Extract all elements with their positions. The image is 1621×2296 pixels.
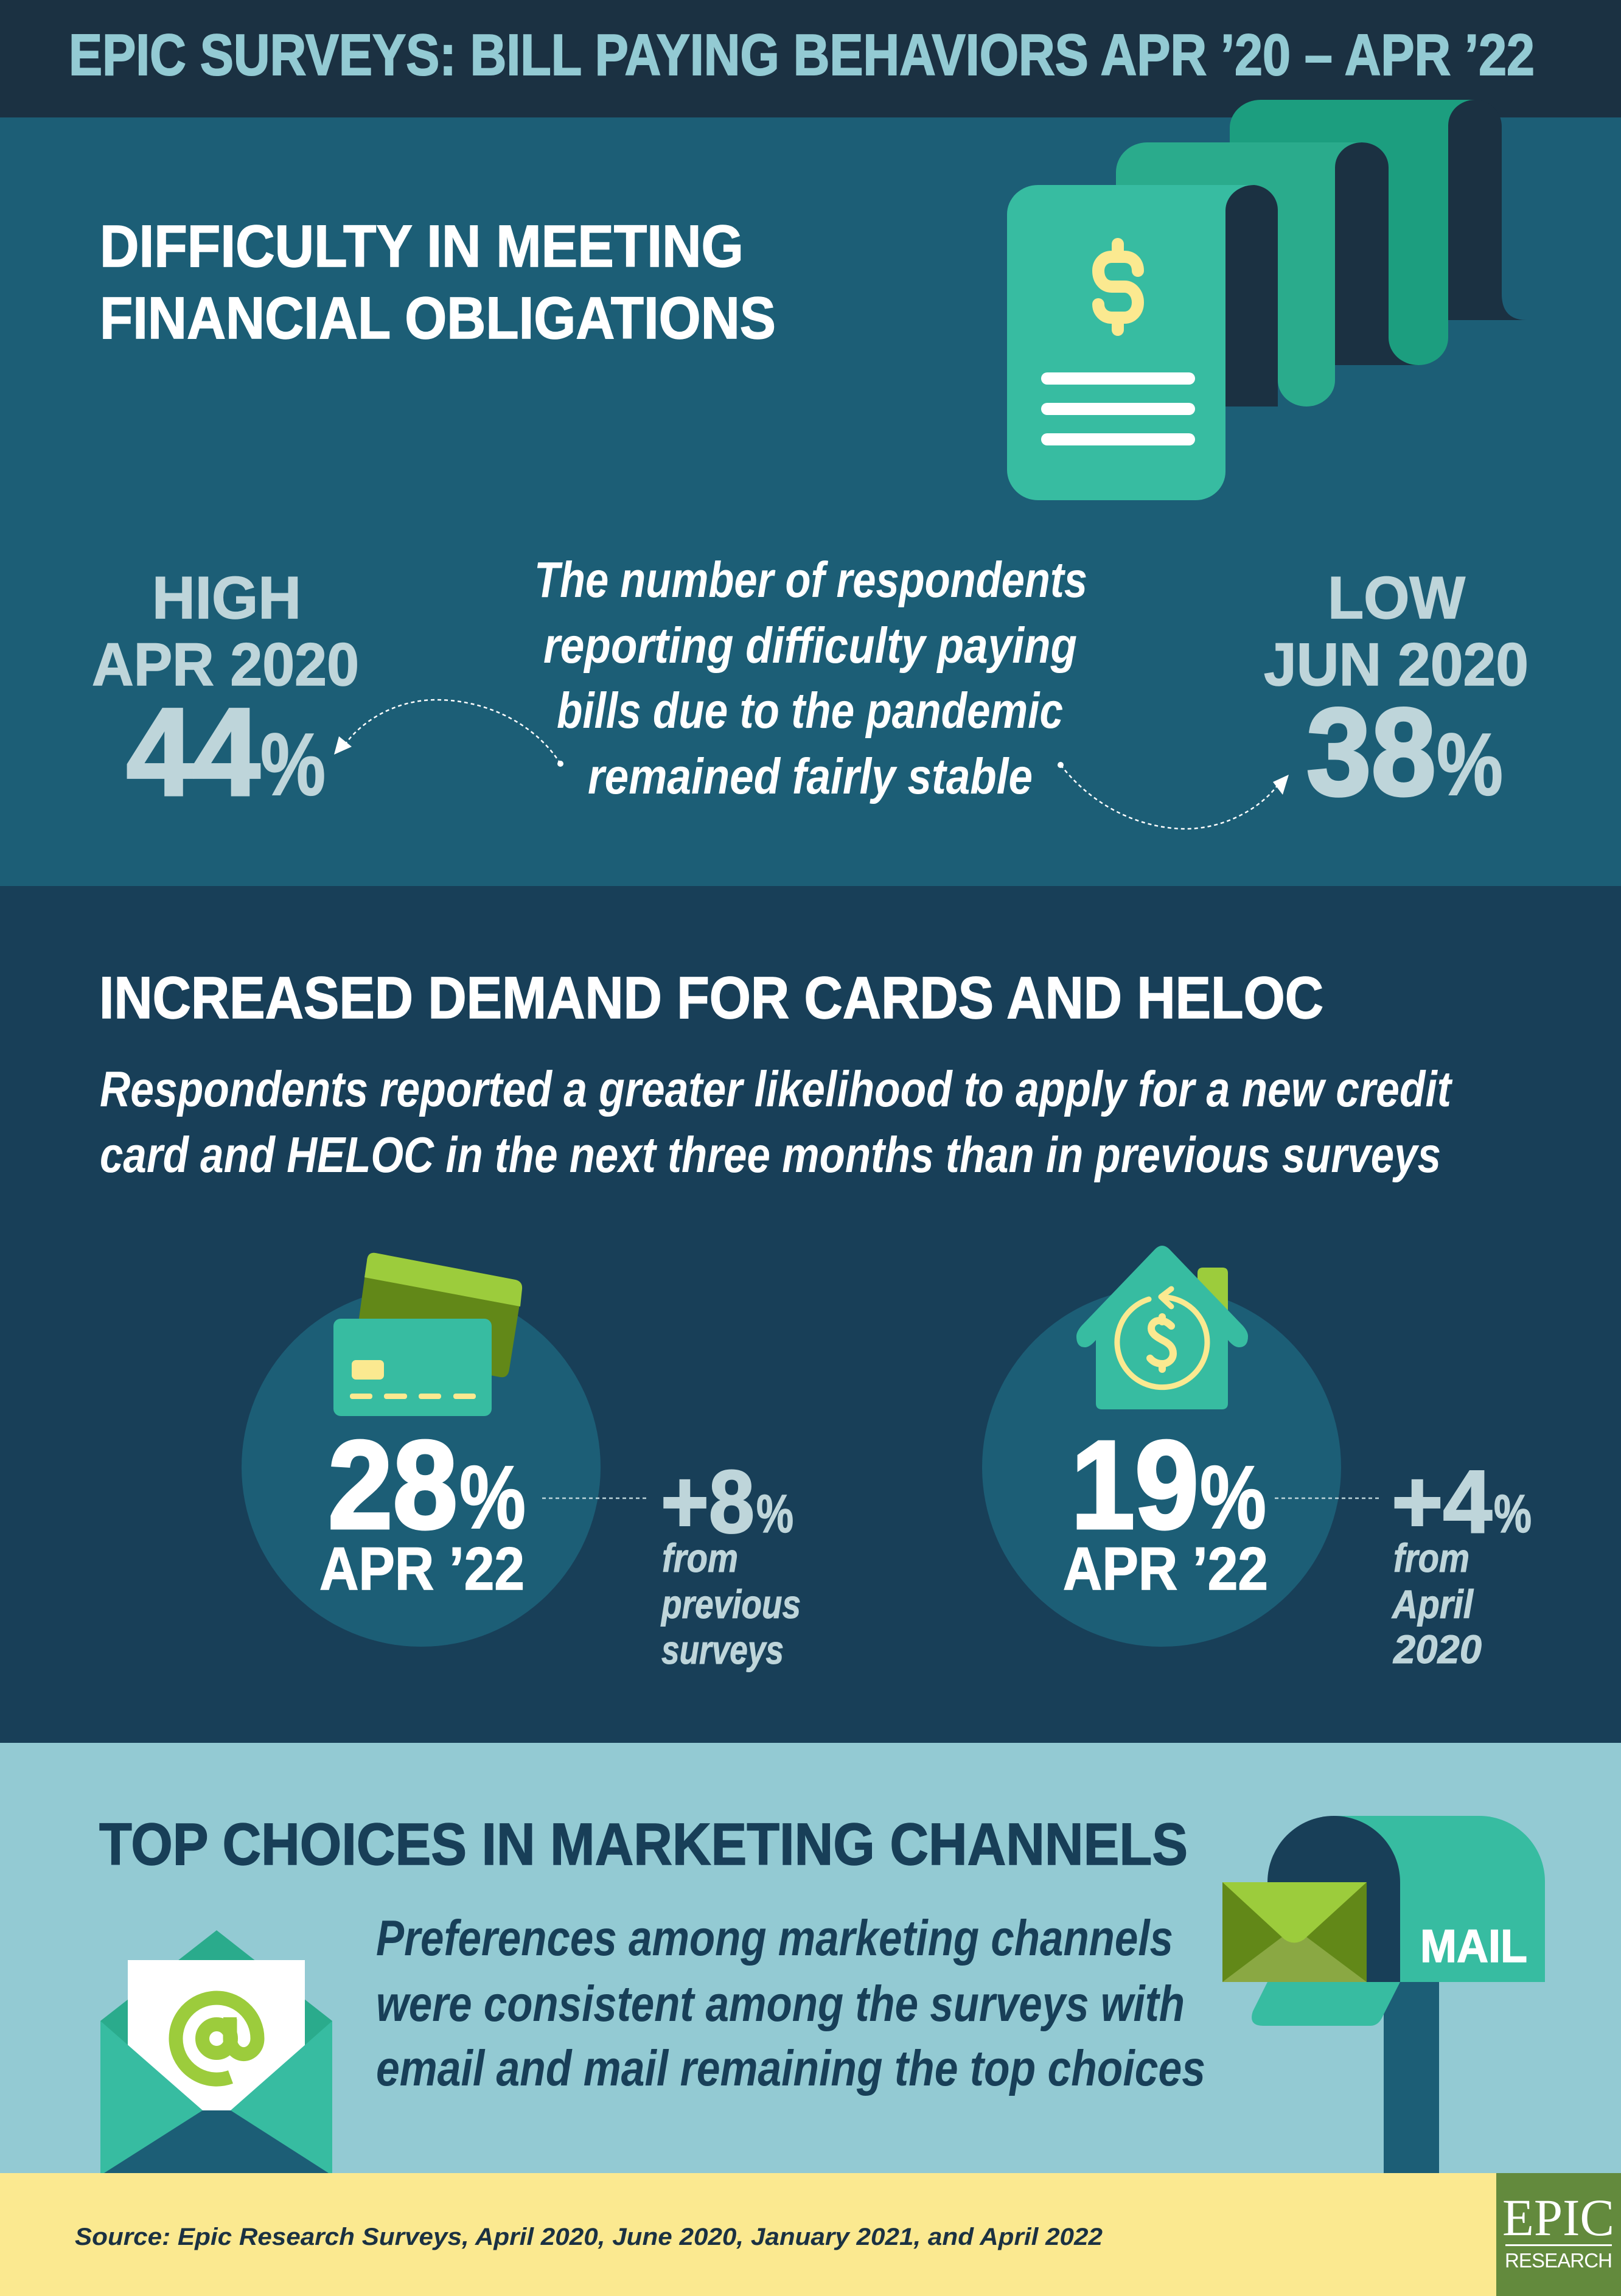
stat: low: JUN 2020 [1264, 630, 1529, 698]
stat: high [92, 564, 359, 822]
stat: +4%: April [1391, 1582, 1474, 1627]
stat: +8%: +8 [661, 1452, 755, 1551]
description text: email and mail remaining the top choices [376, 2040, 1205, 2096]
mail label: MAIL [1420, 1921, 1527, 1972]
description text: reporting difficulty paying [543, 617, 1077, 674]
stat circle: credit card [242, 1253, 601, 1647]
description text: Preferences among marketing channels [376, 1910, 1173, 1966]
stat: high: HIGH [152, 564, 301, 631]
icon: dollar sign on bill [1098, 244, 1138, 330]
heading: marketing channels: TOP CHOICES IN MARKETING CHANNELS [99, 1811, 1188, 1877]
icon: email envelope [100, 1930, 332, 2173]
panel: difficulty in meeting financial obligations [0, 100, 1621, 886]
description text: were consistent among the surveys with [376, 1975, 1185, 2032]
icon: green envelope [1222, 1882, 1367, 1982]
stat: +4% [1391, 1452, 1532, 1672]
connector: HELOC [1275, 1498, 1379, 1499]
icon: at sign [176, 1998, 257, 2079]
connector: credit card [542, 1498, 646, 1499]
icon: stacked bills [1007, 100, 1527, 500]
description text [100, 1061, 1453, 1183]
stat: high: APR 2020 [92, 630, 359, 698]
arrow: to low [1058, 762, 1289, 829]
panel: increased demand [0, 886, 1621, 1743]
heading: increased demand: INCREASED DEMAND FOR CARDS AND HELOC [99, 965, 1323, 1031]
stat: low: LOW [1328, 564, 1465, 631]
stat: 28%: 28 [328, 1415, 458, 1555]
stat: +8%: previous [660, 1582, 801, 1627]
stat: high: 44 [127, 683, 260, 822]
stat: 19%: APR ’22 [1063, 1535, 1268, 1602]
stat: low [1264, 564, 1529, 822]
icon: dollar refresh [1117, 1289, 1207, 1387]
stat: +4%: 2020 [1392, 1627, 1482, 1672]
stat: 28%: APR ’22 [319, 1535, 525, 1602]
stat: 28% [319, 1415, 526, 1602]
stat: low: 38 [1306, 683, 1436, 822]
description text: bills due to the pandemic [557, 682, 1063, 739]
icon: credit cards [333, 1253, 522, 1416]
stat: low: % [1437, 715, 1503, 814]
stat: 19% [1063, 1415, 1268, 1602]
icon: house [1076, 1246, 1248, 1409]
footer band [0, 2173, 1621, 2296]
stat circle: HELOC [982, 1246, 1341, 1647]
stat: 19%: 19 [1071, 1415, 1199, 1555]
description text [376, 1910, 1205, 2096]
header band [0, 0, 1621, 117]
arrow: to high [334, 700, 563, 767]
description text: remained fairly stable [588, 748, 1033, 804]
description text: The number of respondents [534, 551, 1087, 608]
stat: +4%: +4 [1392, 1452, 1492, 1551]
bill lines [1041, 372, 1195, 445]
stat: +4%: % [1494, 1484, 1532, 1544]
heading: difficulty: DIFFICULTY IN MEETING [100, 213, 744, 279]
stat: +8%: from [662, 1535, 738, 1580]
stat: 19%: % [1200, 1448, 1266, 1548]
description text [534, 551, 1087, 804]
stat: 28%: % [459, 1448, 526, 1548]
icon: mailbox [1222, 1816, 1545, 2173]
panel: marketing channels [0, 1743, 1621, 2173]
stat: +8% [660, 1452, 801, 1672]
logo: Epic Research: EPIC [1502, 2188, 1614, 2247]
stat: +8%: surveys [661, 1627, 784, 1672]
stat: +8%: % [756, 1484, 793, 1544]
stat: +4%: from [1393, 1535, 1469, 1580]
logo: Epic Research: RESEARCH [1505, 2249, 1612, 2272]
heading: difficulty: FINANCIAL OBLIGATIONS [100, 285, 776, 351]
source text: Source: Epic Research Surveys, April 2020, June 2020, January 2021, and April 2022 [75, 2224, 1103, 2250]
logo: Epic Research [1496, 2173, 1621, 2296]
heading: difficulty [100, 213, 776, 351]
stat: high: % [260, 715, 326, 814]
